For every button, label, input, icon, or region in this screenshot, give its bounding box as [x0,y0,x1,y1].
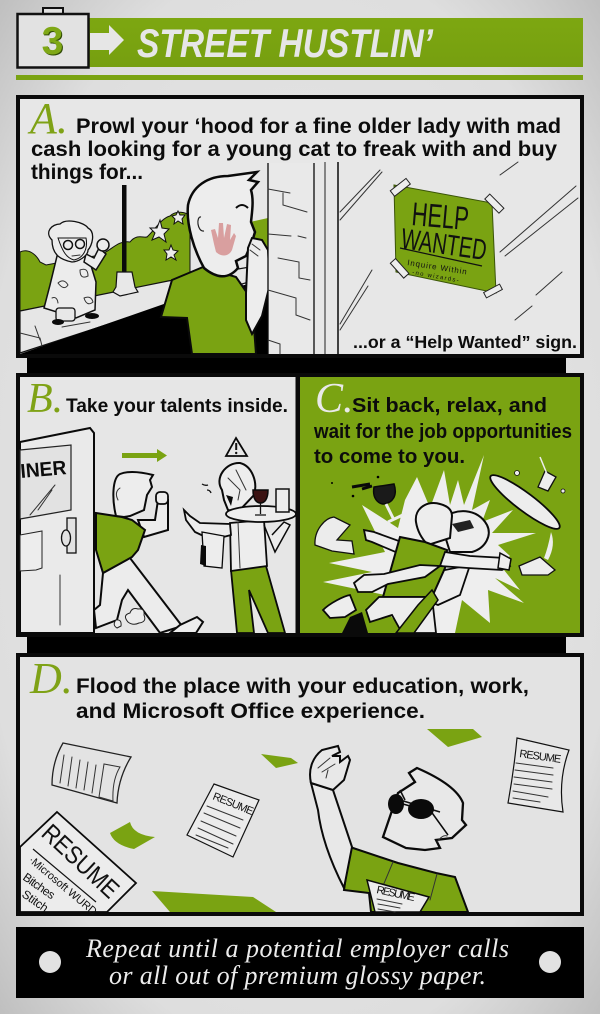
green direction arrow [122,449,167,462]
scene: street with bushes [20,212,268,354]
icon: briefcase with number 3: 3 [43,21,64,64]
panel C text: Sit back, relax, and [352,394,547,417]
icon: briefcase with number 3: 3 [42,20,63,63]
man throwing resumes [310,746,468,912]
heading letter B: B. [27,376,63,422]
panel D text: Flood the place with your education, work, [76,674,529,698]
warning triangle icon [226,438,247,456]
running man [94,472,203,633]
help wanted sign: -no wizards- [412,270,459,284]
fighting figures [323,503,511,633]
icon: briefcase with number 3 [18,8,88,68]
banner text [85,934,509,990]
green flying pages [110,729,482,912]
man with slapped cheek [161,172,270,354]
blank flying page [52,743,131,803]
window glass reflections [340,162,578,330]
green rule under title [16,75,583,80]
waitress with tray [184,463,296,633]
header [16,8,583,80]
panel B [18,375,298,635]
panel A text: cash looking for a young cat to freak with and buy [31,137,557,161]
heading letter D: D. [29,654,73,703]
resume page right [508,738,569,812]
heading letter A: A. [27,94,68,143]
title: STREET HUSTLIN’ [137,22,434,66]
green title band [89,18,583,67]
older lady figure [44,221,109,325]
flying cups [514,457,565,575]
help wanted sign: WANTED [399,223,489,267]
arrow [90,25,124,55]
panel C [298,375,582,635]
panel C text: wait for the job opportunities [313,420,572,443]
brick wall and frame [268,162,338,354]
large resume page: ·Microsoft WURD [26,854,99,918]
flying napkin [315,517,354,554]
large resume page: Bitches [20,870,58,902]
sunglasses [388,794,448,835]
man throwing resumes: RESUME [375,884,416,904]
help wanted sign: Inquire Within [407,258,467,276]
sign text: HELP [410,195,470,237]
panel B text: Take your talents inside. [66,395,288,417]
panel A text: things for... [31,160,143,184]
panel A text: Prowl your ‘hood for a fine older lady with mad [76,114,561,138]
impact starburst [323,455,536,633]
resume page middle: RESUME [211,791,255,818]
diner door: INER [20,457,68,483]
panel C text: to come to you. [314,445,465,468]
banner [16,927,584,998]
large resume page: RESUME [36,819,124,904]
resume stack [367,880,429,912]
panel A text [31,114,561,184]
panel C text [313,394,572,468]
resume page middle [187,784,259,857]
flying wine glass [331,476,407,522]
diner door [20,428,94,633]
impact stars [150,211,185,260]
panel D text [76,674,529,723]
help wanted sign [390,178,504,298]
panel A [18,94,582,356]
banner right hole [539,951,561,973]
large resume page: Stitch [19,887,51,915]
banner text: or all out of premium glossy paper. [109,961,486,990]
banner left hole [39,951,61,973]
flying tray [485,469,565,535]
banner text: Repeat until a potential employer calls [85,934,509,963]
handprint on cheek [211,223,236,256]
lamp post [113,185,138,296]
dust puffs [114,608,145,628]
heading letter C: C. [315,376,354,422]
resume page right: RESUME [519,748,562,766]
caption: help wanted: ...or a “Help Wanted” sign. [353,332,577,352]
panel D text: and Microsoft Office experience. [76,699,425,723]
panel D [18,654,582,918]
connector bars between panels [27,356,566,655]
